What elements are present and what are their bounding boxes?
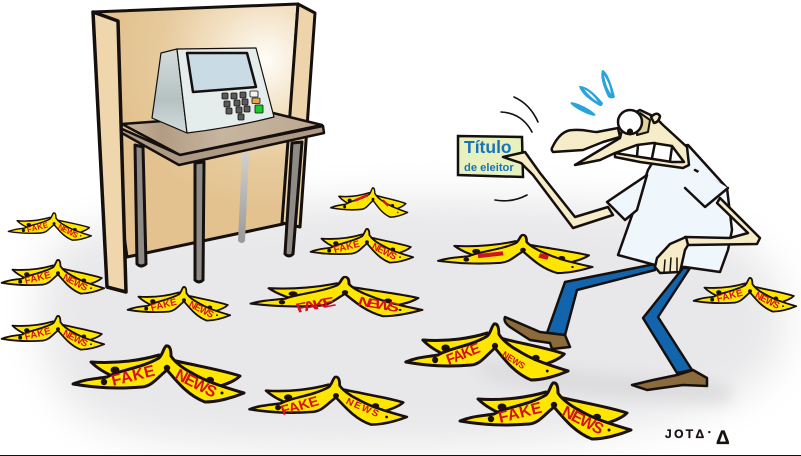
signature: JOTΔ <box>665 427 707 441</box>
banana peel: fake news, below booth: NEWS <box>187 299 216 321</box>
banana peel: fake news, far right: NEWS <box>753 290 782 312</box>
front shoe <box>505 317 570 349</box>
back leg <box>643 268 692 373</box>
eye <box>618 110 642 134</box>
voting booth <box>93 4 324 292</box>
signature: · <box>708 425 714 439</box>
banana peel: fake news, far left top <box>8 213 91 240</box>
table far left leg <box>135 145 146 266</box>
banana peel: fake news, left lower: NEWS <box>61 328 90 350</box>
front leg <box>547 264 655 335</box>
table front leg <box>195 162 204 282</box>
right sleeve <box>685 170 728 207</box>
banana peel: fake news, left middle: FAKE <box>24 270 53 287</box>
banana peel: fake news, under foot <box>406 324 568 380</box>
banana peel: fake news, bottom centre: FAKE <box>279 394 321 419</box>
banana peel: fake news, far left top: FAKE <box>26 220 49 234</box>
banana peel: fake news, left middle: NEWS <box>61 272 90 294</box>
card title: Título <box>464 137 512 157</box>
teeth <box>615 143 684 162</box>
left arm <box>503 152 613 228</box>
motion lines <box>495 97 538 201</box>
banana peel: fake news, upper centre: FAKE <box>333 239 362 256</box>
nose <box>552 128 620 152</box>
banana peel: fake news, under foot: NEWS <box>501 349 527 371</box>
table front edge <box>120 126 324 165</box>
banana peel: fake news, wide centre: NEWS <box>356 295 401 315</box>
ear <box>651 114 660 123</box>
banana peel: fake news, large bottom left <box>73 346 244 402</box>
banana peel: red marks, top centre <box>331 188 408 217</box>
banana peel: fake news, left middle <box>2 260 104 294</box>
right arm <box>685 198 760 245</box>
banana peel: fake news, upper centre: NEWS <box>370 241 399 263</box>
booth right panel <box>282 4 315 227</box>
booth back wall <box>93 4 298 257</box>
voter card <box>458 136 523 177</box>
voting machine <box>152 48 274 133</box>
signature: Δ <box>716 428 732 449</box>
shirt <box>618 145 732 272</box>
screen <box>187 53 256 92</box>
back shoe <box>632 370 707 390</box>
banana peel: fake news, bottom centre: NEWS <box>344 396 381 420</box>
banana peel: fake news, large bottom right: NEWS <box>559 403 606 439</box>
shirt crease <box>695 170 727 188</box>
eyelid <box>637 113 650 135</box>
banana peel: fake news, upper centre <box>311 229 413 263</box>
banana peel: fake news, far right <box>694 278 796 312</box>
banana peel: fake news, below booth: FAKE <box>150 297 179 314</box>
sweat drops <box>569 70 615 118</box>
right hand <box>655 237 688 273</box>
banana peel: fake news, below booth <box>128 287 230 321</box>
banana peel: fake news, far right: FAKE <box>716 288 745 305</box>
banana peel: fake news, under foot: FAKE <box>444 340 483 369</box>
pupil <box>627 128 633 136</box>
banana peel: fake news, large bottom left: FAKE <box>110 363 157 390</box>
banana peel: fake news, bottom centre <box>250 377 407 425</box>
booth left panel <box>93 12 126 292</box>
card subtitle: de eleitor <box>464 162 514 174</box>
banana peel: fake news, left lower <box>2 316 104 350</box>
ghost table leg <box>238 153 249 243</box>
table top <box>122 113 322 155</box>
table right leg <box>285 142 302 256</box>
banana peel: red marks, centre right <box>438 235 592 273</box>
keypad <box>222 91 263 120</box>
banana peel: fake news, large bottom right: FAKE <box>497 400 544 427</box>
banana peel: fake news, left lower: FAKE <box>24 326 53 343</box>
banana peel: fake news, wide centre: FAKE <box>294 294 338 316</box>
banana peel: fake news, large bottom left: NEWS <box>172 366 219 402</box>
banana peel: fake news, large bottom right <box>460 383 631 439</box>
banana peel: fake news, far left top: NEWS <box>56 222 80 240</box>
banana peel: fake news, wide centre <box>251 277 422 316</box>
character: voter <box>503 110 760 390</box>
shirt left sleeve <box>607 175 647 220</box>
head <box>575 110 689 168</box>
